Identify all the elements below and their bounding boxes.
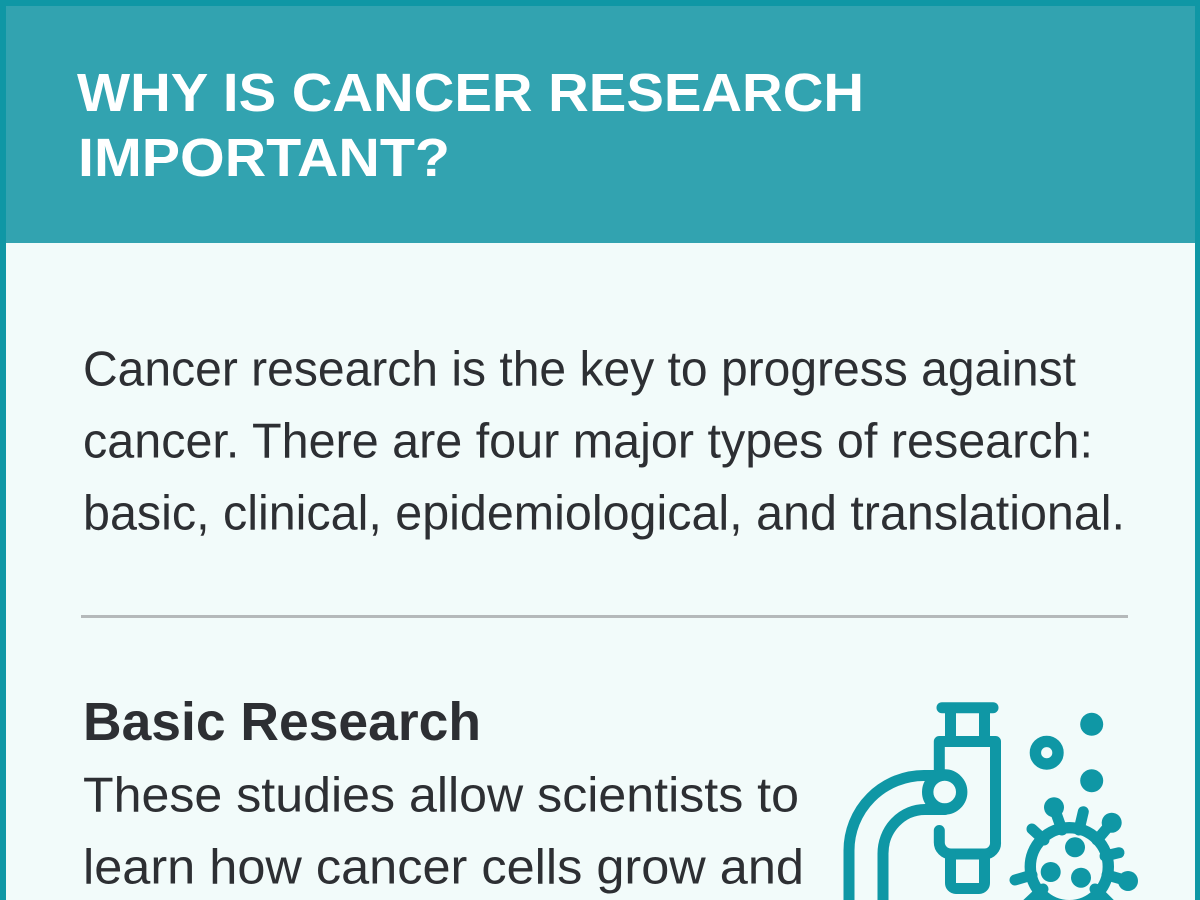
title: WHY IS CANCER RESEARCH bbox=[77, 63, 864, 123]
icon: virus bbox=[1015, 797, 1138, 900]
section body text bbox=[83, 768, 804, 894]
intro text block: basic, clinical, epidemiological, and translational. bbox=[83, 486, 1125, 540]
section body text: These studies allow scientists to bbox=[83, 768, 799, 822]
section body text: learn how cancer cells grow and bbox=[83, 840, 804, 894]
icon: microscope bbox=[849, 708, 996, 900]
intro text block: Cancer research is the key to progress against bbox=[83, 342, 1076, 396]
header banner bbox=[6, 6, 1195, 243]
title: IMPORTANT? bbox=[78, 128, 450, 188]
intro text block: cancer. There are four major types of research: bbox=[83, 414, 1093, 468]
title bbox=[77, 63, 864, 188]
section heading: Basic Research: Basic Research bbox=[83, 692, 481, 752]
intro text block bbox=[83, 342, 1125, 540]
icon: cells bbox=[1035, 713, 1103, 792]
